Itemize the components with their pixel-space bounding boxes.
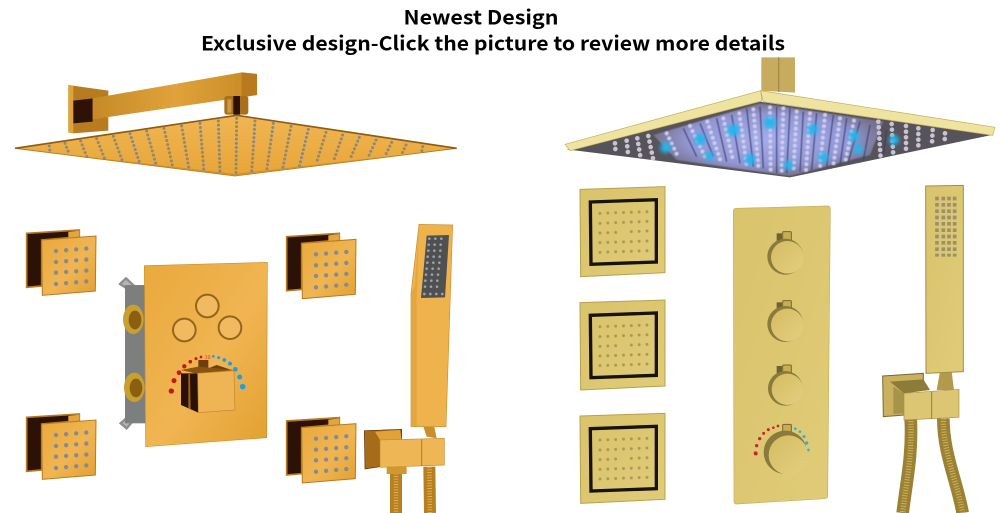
lower components: left set	[27, 224, 453, 513]
ceiling post	[761, 57, 795, 93]
rain streaks	[683, 107, 887, 173]
title	[201, 2, 785, 56]
diverter knob 3	[768, 365, 803, 406]
body jet: middle	[580, 300, 665, 390]
wall holder	[364, 427, 444, 474]
temperature reading: 38	[205, 352, 211, 361]
hand shower	[411, 224, 453, 427]
hoses	[903, 418, 963, 513]
thermostat handle	[181, 360, 235, 413]
lower components: right set	[580, 185, 963, 513]
temperature scale: cold	[212, 355, 245, 389]
thermostatic valve panel	[733, 206, 830, 504]
connector	[224, 96, 248, 115]
light streaks	[667, 107, 854, 173]
thermostat knob	[754, 424, 810, 475]
body jet: top left	[27, 230, 96, 295]
rain shower head with arm	[15, 72, 457, 176]
hose	[396, 467, 430, 513]
wall holder	[883, 373, 959, 420]
LED rain shower head	[565, 57, 995, 177]
wall plate	[68, 85, 108, 133]
plate edge left	[565, 91, 762, 151]
diverter knob 1	[767, 232, 804, 275]
temperature scale: hot	[169, 356, 202, 394]
diverter knob 2	[767, 301, 804, 342]
heading: newest design: Newest Design	[404, 2, 558, 30]
square plate	[15, 115, 457, 176]
body jet: top	[580, 187, 665, 277]
push buttons	[173, 295, 241, 341]
body jet: top right	[287, 233, 356, 299]
body jet: bottom right	[287, 418, 356, 483]
panel: left gold shower set	[15, 72, 457, 513]
plate edge right	[761, 91, 995, 135]
thermostatic valve plate	[144, 262, 267, 447]
body jet: bottom left	[27, 414, 96, 479]
subheading: click to review: Exclusive design-Click the picture to review more details	[201, 28, 785, 56]
underside	[567, 102, 992, 177]
body jet: bottom	[580, 413, 665, 503]
blue lights	[660, 117, 899, 170]
LED glow	[653, 103, 883, 176]
outer droplets	[615, 122, 945, 160]
hand shower	[926, 185, 963, 390]
nozzles	[49, 118, 423, 174]
arm	[93, 72, 257, 119]
panel: right brushed gold shower set	[565, 57, 995, 513]
rough-in valve body	[120, 278, 146, 428]
